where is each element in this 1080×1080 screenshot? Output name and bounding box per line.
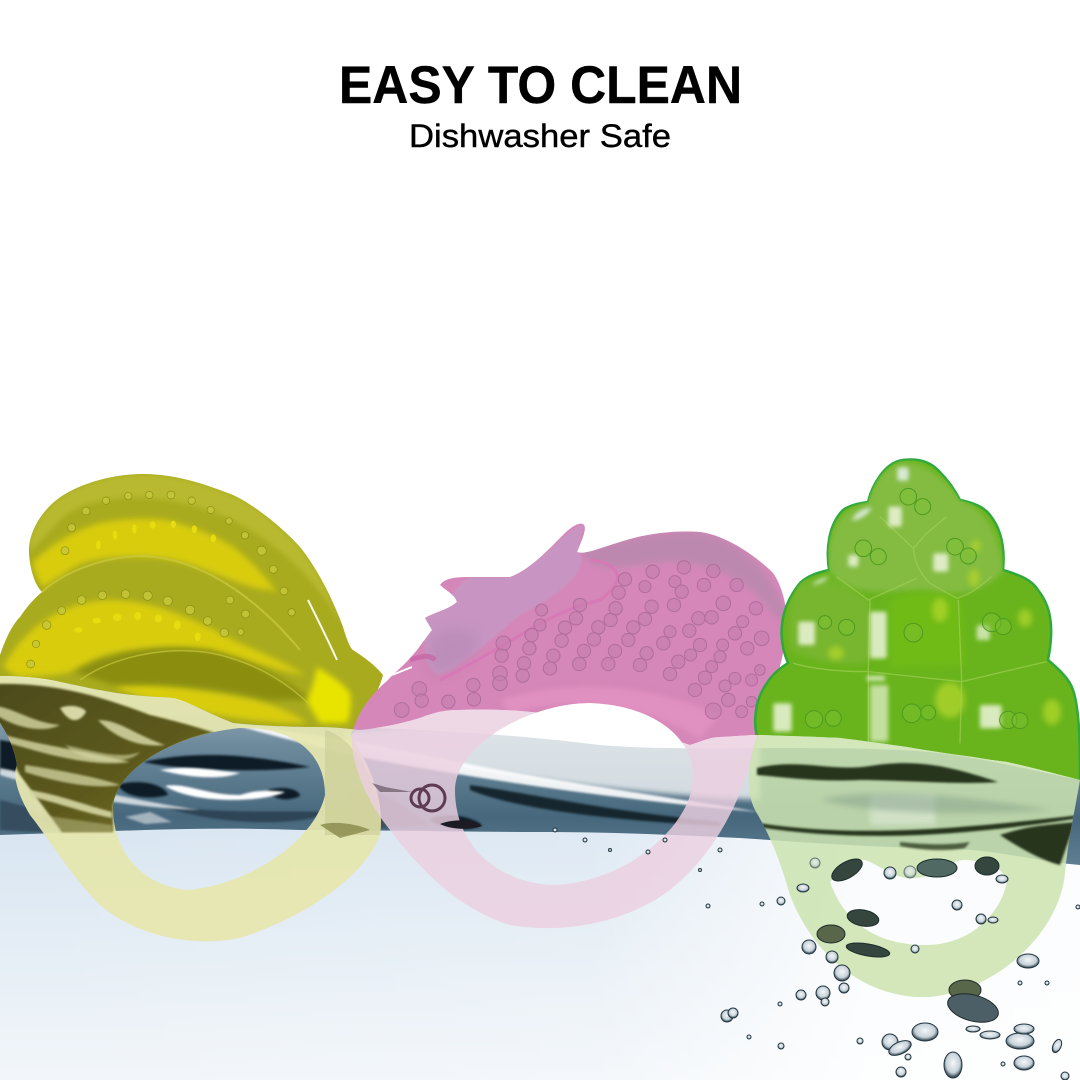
air bubbles	[553, 828, 1080, 1080]
pale water zone inside strawberry ring	[345, 726, 760, 800]
olive reflection in banana underwater	[0, 684, 382, 838]
banana bright crescents	[3, 519, 307, 723]
subtitle: Dishwasher Safe	[409, 118, 671, 154]
teether: yellow banana	[0, 474, 383, 941]
banana surface dots	[27, 491, 295, 668]
water body background	[0, 800, 1080, 1080]
teether: green grapes	[749, 459, 1080, 997]
grapes ring below water	[748, 735, 1080, 998]
grapes upper body above water	[754, 458, 1080, 780]
strawberry surface dots	[394, 561, 769, 719]
teether: pink strawberry	[352, 524, 790, 928]
banana upper body above water	[0, 474, 383, 730]
banana ring below water	[0, 676, 381, 942]
title: EASY TO CLEAN	[339, 56, 742, 115]
strawberry ring below water	[352, 710, 757, 928]
water surface wave band	[0, 676, 1080, 865]
strawberry upper body above water	[354, 524, 786, 745]
dark water streaks	[0, 740, 720, 832]
dark elongated bubbles	[817, 855, 1001, 1027]
white water highlights	[0, 725, 760, 824]
